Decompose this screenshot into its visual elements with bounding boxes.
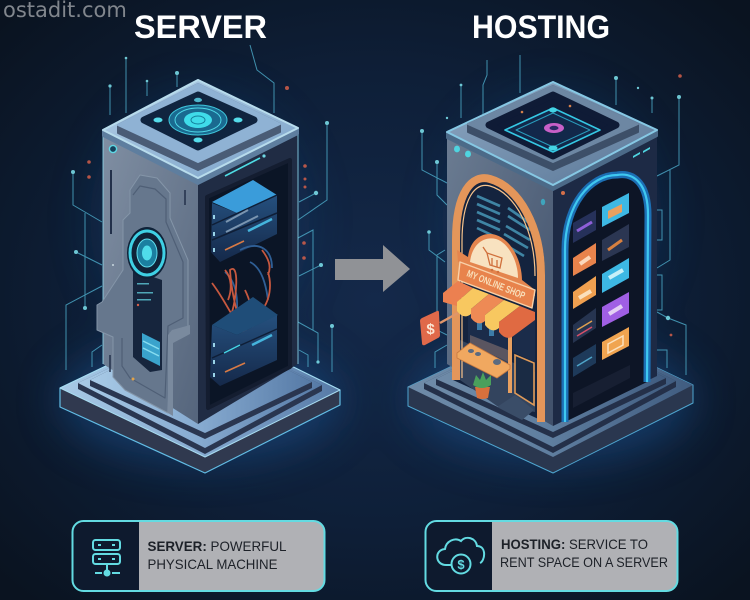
panel: hosting definition	[426, 521, 678, 591]
server caption: SERVER: POWERFUL	[148, 538, 287, 554]
sign band	[458, 262, 535, 308]
server red and blue cables	[212, 246, 272, 344]
server top	[103, 80, 298, 184]
hosting orange arch storefront	[420, 176, 545, 422]
panel: server definition	[72, 521, 324, 591]
server base platform	[60, 321, 340, 473]
arch inner highlight	[462, 185, 535, 378]
side window	[513, 320, 535, 362]
dollar tag: $	[426, 321, 435, 338]
server right face	[198, 128, 298, 424]
hosting tower	[408, 82, 693, 473]
striped awning	[443, 281, 535, 338]
icon: cloud with dollar: $	[457, 557, 465, 572]
hosting caption: HOSTING: SERVICE TO	[501, 536, 648, 552]
steps	[497, 395, 534, 420]
shop counter	[457, 343, 510, 378]
server edge highlight	[103, 128, 298, 364]
server caption	[148, 538, 287, 572]
hosting base platform	[408, 318, 693, 473]
dollar tag	[420, 311, 458, 345]
counter buttons	[468, 349, 501, 365]
server side door panel	[97, 145, 190, 416]
blue glow behind towers	[60, 90, 692, 460]
hosting indicator lights	[454, 146, 650, 205]
icon: server stack	[93, 540, 120, 576]
door post	[508, 333, 512, 393]
sign band: MY ONLINE SHOP	[465, 269, 527, 302]
icon: cloud with dollar	[437, 538, 484, 574]
shop window below awning	[468, 313, 510, 363]
title: hosting: HOSTING	[472, 9, 610, 45]
server caption: PHYSICAL MACHINE	[148, 556, 278, 572]
server rack upper	[211, 180, 277, 262]
window reflections	[470, 320, 508, 362]
potted plant	[473, 372, 491, 399]
hosting left face	[447, 132, 553, 426]
hosting blue arch and app wall	[565, 175, 648, 422]
circuit lines: server	[66, 45, 334, 372]
sign dome with cart	[457, 234, 535, 296]
orange arch	[456, 178, 541, 422]
server left face	[103, 130, 198, 424]
hosting right face	[553, 130, 657, 426]
panel icon background	[72, 521, 139, 591]
hosting panel icon background	[426, 521, 492, 591]
server open window	[207, 154, 290, 408]
arrow	[335, 245, 410, 292]
hosting caption	[500, 536, 668, 570]
circuit lines: hosting	[420, 55, 686, 375]
door	[515, 355, 534, 405]
server tower	[60, 80, 340, 473]
title: server: SERVER	[134, 9, 267, 45]
hosting top	[447, 82, 657, 190]
hosting caption: RENT SPACE ON A SERVER	[500, 554, 668, 570]
shop lower wall	[460, 340, 535, 412]
server rack lower	[210, 297, 278, 386]
app tiles	[573, 193, 630, 408]
